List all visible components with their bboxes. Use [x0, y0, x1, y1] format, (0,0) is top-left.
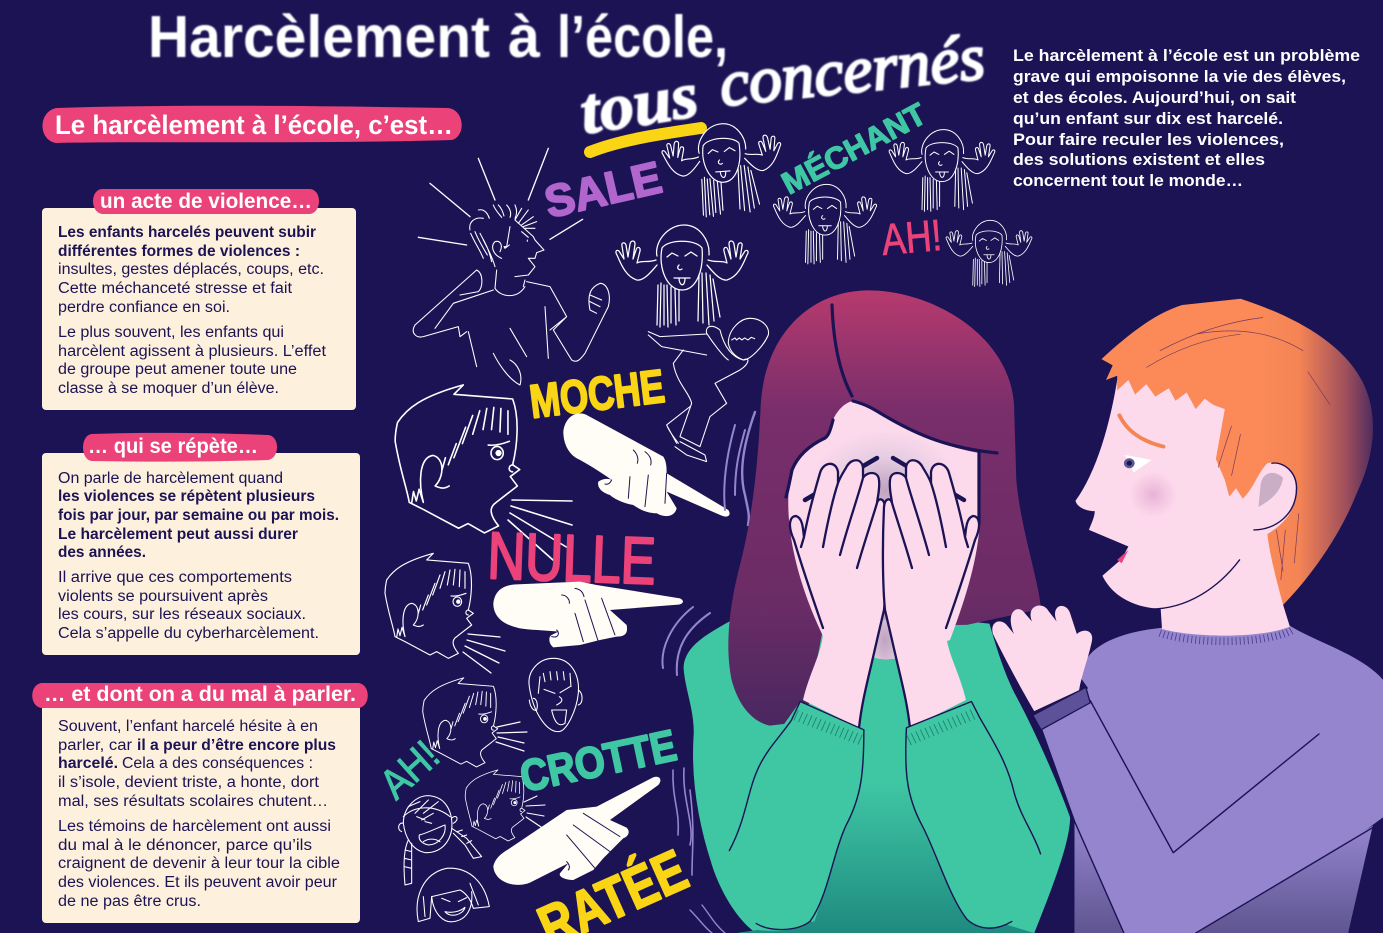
- illustration: shouting head, smallest: [465, 770, 545, 841]
- panel: un acte de violence: harcèlent agissent à plusieurs. L’effet: [58, 343, 327, 360]
- ear: [1254, 463, 1297, 530]
- intro text: [1013, 46, 1360, 190]
- pill heading: qui se répète: … qui se répète…: [88, 435, 258, 458]
- panel: un acte de violence: [42, 189, 356, 410]
- panel: qui se répète: Il arrive que ces comportements: [58, 569, 292, 586]
- panel: qui se répète: les violences se répètent plusieurs: [58, 488, 315, 505]
- title: Harcèlement à l'école: l’école,: [557, 4, 728, 70]
- panel: et dont on a du mal à parler: Cela a des conséquences :: [122, 755, 313, 772]
- cheek: [1130, 472, 1176, 517]
- illustration: girl face and hands: [786, 305, 997, 728]
- panel: et dont on a du mal à parler: harcelé.: [58, 755, 118, 772]
- eyebrows: [805, 458, 964, 500]
- word: NULLE: NULLE: [487, 518, 657, 598]
- illustration: girl sticking tongue out, far right: [946, 220, 1032, 287]
- face outline, fringe and parting: [786, 305, 997, 523]
- word: concernés: concernés: [716, 21, 988, 121]
- intro text: Le harcèlement à l’école est un problème: [1013, 46, 1360, 65]
- sweater body: [684, 619, 1070, 933]
- hand on shoulder: [992, 605, 1092, 711]
- yellow underline: [590, 128, 701, 152]
- illustration: shouting head, small: [423, 678, 527, 767]
- illustration: jumping child: [648, 318, 769, 462]
- hair: [1101, 299, 1373, 605]
- shout lines: [508, 500, 572, 560]
- section heading pill: Le harcèlement à l’école, c’est…: [55, 110, 453, 140]
- intro text: et des écoles. Aujourd’hui, on sait: [1013, 88, 1296, 107]
- pill heading: un acte de violence: un acte de violence…: [100, 190, 312, 213]
- word: SALE: SALE: [540, 152, 666, 228]
- right sleeve: [906, 701, 1069, 928]
- jaw line: [1151, 560, 1240, 609]
- intro text: Pour faire reculer les violences,: [1013, 130, 1284, 149]
- icon: pointing hand, top: [563, 413, 730, 517]
- icon: pointing hand, bottom: [493, 777, 660, 885]
- panel: qui se répète: [42, 433, 360, 655]
- panel: un acte de violence: insultes, gestes déplacés, coups, etc.: [58, 261, 324, 278]
- panel: qui se répète: fois par jour, par semaine ou par mois.: [58, 507, 339, 524]
- panel: et dont on a du mal à parler: il a peur d’être encore plus: [137, 737, 336, 754]
- shout lines: [463, 634, 505, 673]
- head and neck: [1075, 363, 1357, 636]
- sweater shaded bottom right: [1196, 826, 1373, 933]
- cuff: [1033, 687, 1090, 730]
- word: MÉCHANT: MÉCHANT: [776, 96, 932, 201]
- sweater arm lines: [1041, 701, 1383, 933]
- panel: un acte de violence: Les enfants harcelés peuvent subir: [58, 224, 316, 241]
- panel: un acte de violence: Le plus souvent, les enfants qui: [58, 324, 284, 341]
- panel: et dont on a du mal à parler: il s’isole, devient triste, a honte, dort: [58, 774, 320, 791]
- panel: un acte de violence: différentes formes de violences :: [58, 243, 300, 260]
- illustration: smiling girl with bob: [417, 868, 489, 922]
- panel: et dont on a du mal à parler: craignent de devenir à leur tour la cible: [58, 855, 340, 872]
- illustration: laughing girl with braids: [399, 796, 482, 885]
- eye: [1124, 455, 1152, 472]
- panel: un acte de violence: Cette méchanceté stresse et fait: [58, 280, 293, 297]
- word: AH! pink: AH!: [880, 211, 944, 265]
- panel: et dont on a du mal à parler: de ne pas être crus.: [58, 893, 201, 910]
- panel: un acte de violence: classe à se moquer d’un élève.: [58, 380, 279, 397]
- sweater shaded bottom left: [1075, 821, 1124, 933]
- motion lines: [662, 412, 755, 933]
- word: CROTTE: CROTTE: [516, 721, 681, 802]
- shout lines: [524, 796, 545, 827]
- panel: un acte de violence: perdre confiance en soi.: [58, 299, 230, 316]
- panel: qui se répète: violents se poursuivent après: [58, 588, 268, 605]
- panel: qui se répète: On parle de harcèlement quand: [58, 470, 283, 487]
- intro text: concernent tout le monde…: [1013, 171, 1243, 190]
- icon: pointing hand, middle: [493, 582, 683, 647]
- panel: et dont on a du mal à parler: des violences. Et ils peuvent avoir peur: [58, 874, 337, 891]
- tongue: [1117, 550, 1128, 563]
- intro text: qu’un enfant sur dix est harcelé.: [1013, 109, 1283, 128]
- hair strands: [1146, 317, 1330, 580]
- shout lines: [496, 722, 527, 751]
- illustration: angry boy with fists: [413, 148, 609, 385]
- purple sweater: [1041, 626, 1383, 933]
- illustration: girl sticking tongue out, large: [616, 225, 748, 327]
- panel: qui se répète: des années.: [58, 544, 146, 561]
- word: tous: tous: [575, 58, 703, 149]
- sweater chest: [736, 657, 1034, 933]
- word: MOCHE: MOCHE: [527, 359, 667, 428]
- title: Harcèlement à l'école: à: [508, 4, 540, 70]
- panel: et dont on a du mal à parler: Les témoins de harcèlement ont aussi: [58, 818, 331, 835]
- panel: et dont on a du mal à parler: [32, 683, 368, 923]
- pill heading: et dont on a du mal à parler: … et dont on a du mal à parler.: [44, 683, 356, 706]
- intro text: grave qui empoisonne la vie des élèves,: [1013, 67, 1346, 86]
- left sleeve: [711, 701, 864, 931]
- illustration: angry front face: [529, 658, 582, 732]
- collar ribbing: [1160, 631, 1292, 641]
- panel: et dont on a du mal à parler: parler, car: [58, 737, 132, 754]
- illustration: girl sleeves: [711, 701, 1069, 931]
- title: Harcèlement à l'école: Harcèlement: [148, 4, 490, 70]
- panel: un acte de violence: de groupe peut amener toute une: [58, 361, 297, 378]
- title: Harcèlement à l'école: [148, 4, 728, 70]
- illustration: girl body, sweater and hair: [684, 290, 1070, 933]
- word: AH! teal: AH!: [371, 731, 448, 808]
- face: [788, 401, 980, 659]
- intro text: des solutions existent et elles: [1013, 150, 1265, 169]
- panel: et dont on a du mal à parler: mal, ses résultats scolaires chutent…: [58, 793, 328, 810]
- illustration: shouting head, middle: [385, 553, 505, 673]
- handwritten title: tous concernés: [575, 21, 988, 152]
- eyebrow: [1119, 415, 1163, 447]
- illustration: girl sticking tongue out, top right: [889, 130, 995, 211]
- panel: et dont on a du mal à parler: Souvent, l’enfant harcelé hésite à en: [58, 718, 318, 735]
- panel: qui se répète: Cela s’appelle du cyberharcèlement.: [58, 625, 319, 642]
- illustration: girl sticking tongue out, top left: [660, 120, 785, 220]
- left hand: [790, 460, 886, 728]
- illustration: girl sticking tongue out, centre: [773, 184, 877, 264]
- panel: et dont on a du mal à parler: du mal à le dénoncer, parce qu’ils: [58, 837, 312, 854]
- right hand: [883, 460, 979, 728]
- panel: qui se répète: les cours, sur les réseaux sociaux.: [58, 606, 306, 623]
- face shading: [832, 440, 938, 660]
- illustration: shouting head, large: [395, 385, 572, 560]
- illustration: boy speaking to the girl: [992, 299, 1383, 933]
- hair: [728, 290, 1041, 726]
- panel: qui se répète: Le harcèlement peut aussi durer: [58, 526, 298, 543]
